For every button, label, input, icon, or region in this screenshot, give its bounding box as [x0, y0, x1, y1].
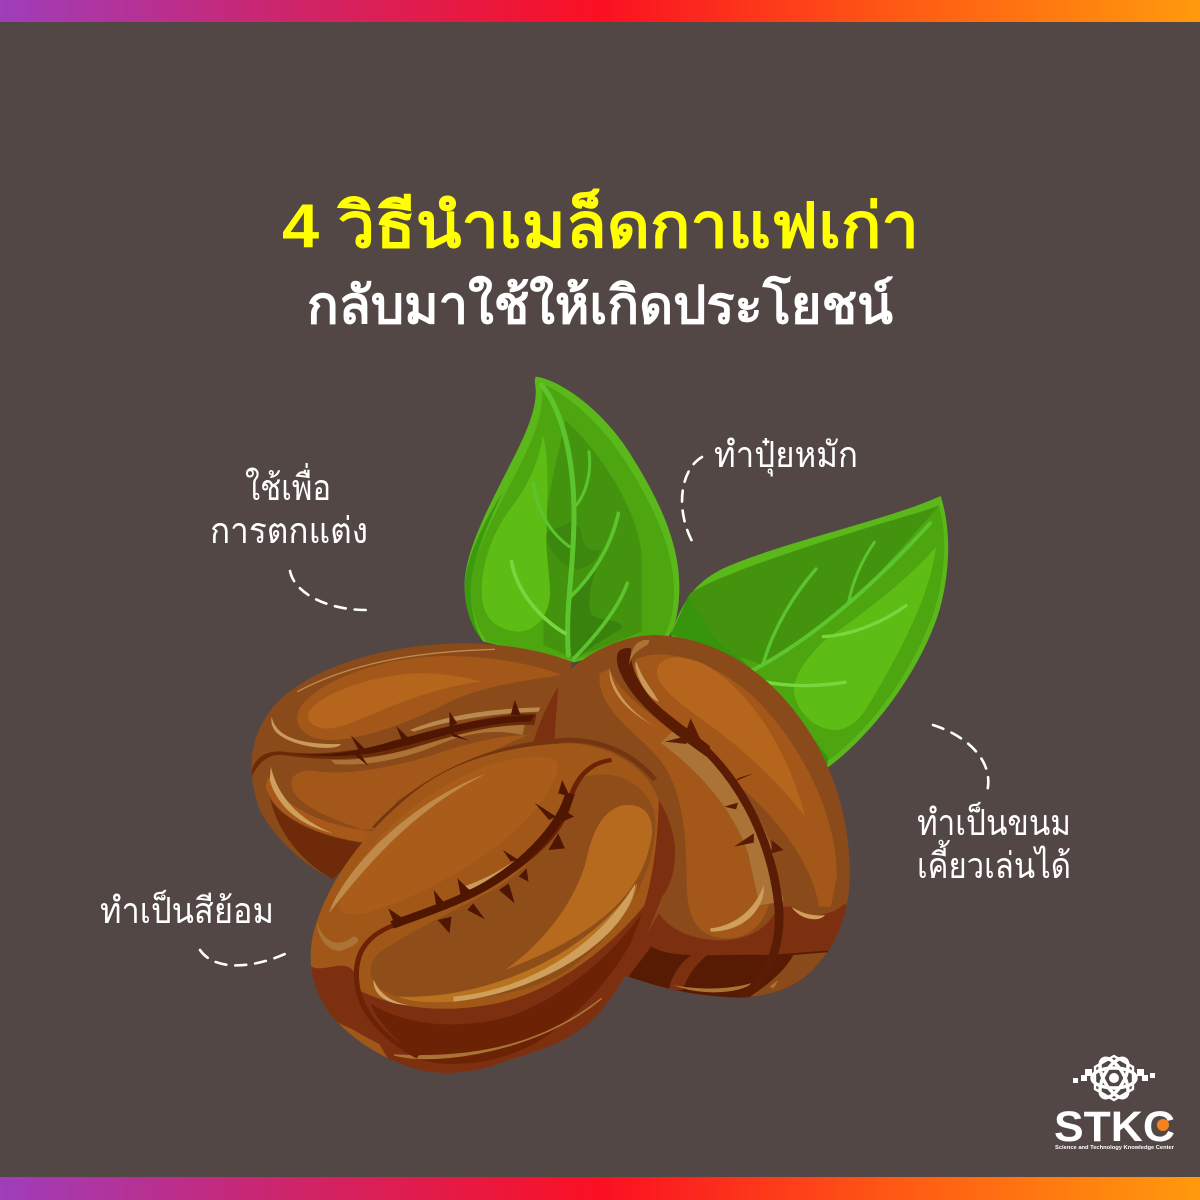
logo tagline: Science and Technology Knowledge Center — [1055, 1145, 1175, 1151]
logo wordmark: STKC — [1054, 1103, 1175, 1151]
title — [282, 188, 919, 335]
top gradient bar — [0, 0, 1200, 22]
label: decoration: ใช้เพื่อ — [245, 463, 331, 508]
leaf: upright — [465, 377, 679, 662]
leaf veins — [512, 385, 627, 658]
icon: atom — [1092, 1054, 1136, 1102]
label: snack — [917, 800, 1071, 886]
dashed arrow: decoration — [290, 571, 366, 610]
icon: pixel squares — [1073, 1069, 1155, 1083]
leaf: right — [671, 496, 948, 768]
dashed arrow: compost — [682, 457, 702, 543]
bean: front — [311, 743, 683, 1087]
leaf veins — [747, 523, 930, 686]
dashed arrow: snack — [933, 725, 988, 792]
title line 2: กลับมาใช้ให้เกิดประโยชน์ — [307, 274, 894, 335]
label: snack: ทำเป็นขนม — [917, 800, 1071, 843]
label: decoration — [210, 463, 368, 551]
dashed arrow: dye — [200, 950, 287, 965]
title line 1: 4 วิธีนำเมล็ดกาแฟเก่า — [282, 188, 919, 261]
logo orange dot — [1157, 1119, 1169, 1131]
bean: left — [252, 643, 572, 879]
illustration: green leaves — [465, 377, 948, 768]
bean: front shadow rim — [374, 740, 655, 828]
label: decoration: การตกแต่ง — [210, 510, 368, 551]
bean: right — [556, 635, 857, 1020]
illustration: coffee beans — [252, 635, 857, 1087]
logo: STKC — [1054, 1054, 1175, 1151]
label: dye: ทำเป็นสีย้อม — [100, 888, 274, 931]
label: compost: ทำปุ๋ยหมัก — [714, 434, 858, 477]
label: snack: เคี้ยวเล่นได้ — [917, 839, 1071, 886]
bottom gradient bar — [0, 1177, 1200, 1200]
